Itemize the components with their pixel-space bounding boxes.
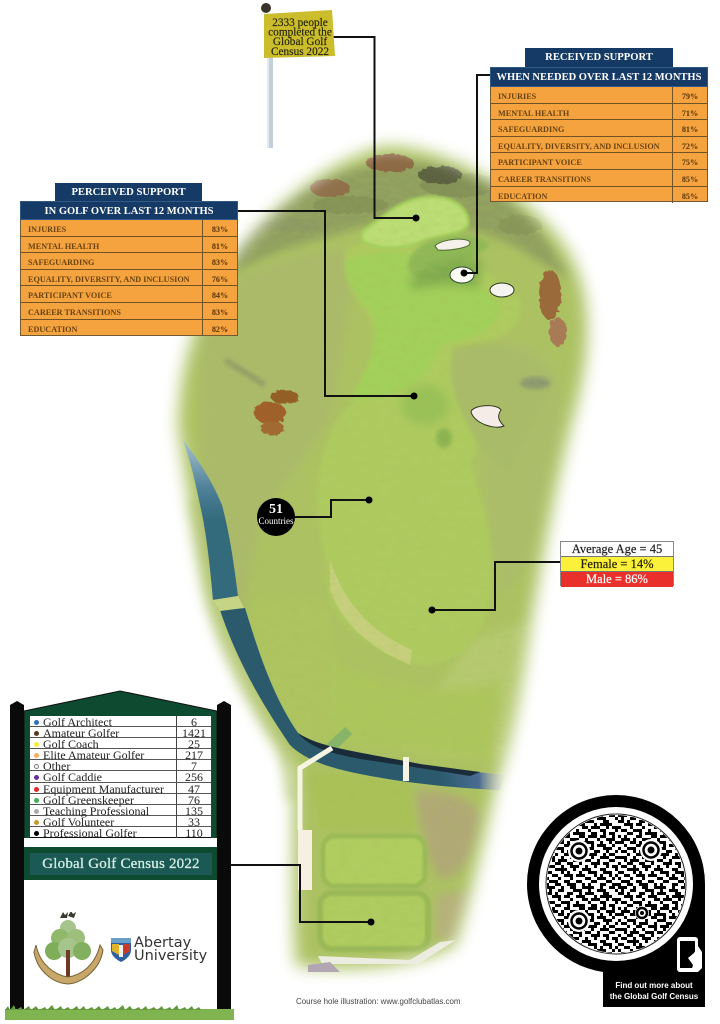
logo: Abertay University — [111, 935, 207, 964]
paths and bridges — [300, 748, 332, 830]
callout: age and gender: Male = 86% — [586, 572, 648, 586]
table: perceived support: MENTAL HEALTH — [28, 242, 99, 251]
table: received support: EQUALITY, DIVERSITY, AND INCLUSION — [498, 142, 660, 151]
texture — [150, 120, 620, 990]
role counts table: Golf Coach — [43, 737, 99, 751]
course hole illustration — [166, 134, 600, 981]
table: received support: 85% — [682, 192, 698, 201]
rough patches — [452, 356, 480, 441]
table: perceived support: INJURIES — [28, 225, 66, 234]
wordmark — [134, 935, 207, 964]
wordmark: Abertay — [134, 935, 191, 951]
QR code badge — [527, 795, 705, 1007]
role counts table: 135 — [185, 804, 203, 818]
rough base — [166, 134, 600, 981]
role counts table: Amateur Golfer — [43, 726, 119, 740]
table: received support: SAFEGUARDING — [498, 125, 564, 134]
role counts table: 1421 — [182, 726, 206, 740]
flag: respondent count: 2333 people — [272, 17, 328, 29]
finder rings — [568, 839, 662, 932]
table: perceived support: 84% — [212, 291, 228, 300]
table: perceived support: IN GOLF OVER LAST 12 MONTHS — [45, 206, 213, 217]
logo: golf crest — [34, 912, 104, 984]
flag: respondent count: Global Golf — [273, 36, 327, 48]
table: perceived support: 76% — [212, 275, 228, 284]
table: perceived support: PERCEIVED SUPPORT — [71, 187, 186, 198]
table: perceived support: 83% — [212, 308, 228, 317]
caption: Find out more about — [615, 981, 693, 990]
role counts table — [30, 716, 211, 838]
bushes — [254, 154, 567, 435]
table: perceived support: CAREER TRANSITIONS — [28, 308, 121, 317]
role counts table: 25 — [188, 737, 200, 751]
icon: phone with hand — [677, 937, 702, 972]
table: perceived support: 83% — [212, 225, 228, 234]
role counts table: 217 — [185, 748, 203, 762]
role counts table: Golf Caddie — [43, 770, 102, 784]
table: received support: PARTICIPANT VOICE — [498, 158, 582, 167]
table: perceived support: SAFEGUARDING — [28, 258, 94, 267]
table: received support: 81% — [682, 125, 698, 134]
illustration credit: Course hole illustration: www.golfclubatlas.com — [296, 997, 460, 1006]
shield — [111, 938, 131, 962]
table: received support: 85% — [682, 175, 698, 184]
table: perceived support: PARTICIPANT VOICE — [28, 291, 112, 300]
bridge over river — [213, 596, 244, 611]
table: perceived support: EDUCATION — [28, 325, 77, 334]
table: received support: 72% — [682, 142, 698, 151]
table: perceived support: 83% — [212, 258, 228, 267]
table: received support: MENTAL HEALTH — [498, 109, 569, 118]
table: received support: 75% — [682, 158, 698, 167]
role counts table: 47 — [188, 782, 200, 796]
flag: respondent count: Census 2022 — [271, 46, 329, 58]
table: received support: EDUCATION — [498, 192, 547, 201]
sign frame — [5, 690, 234, 1020]
caption: the Global Golf Census — [610, 992, 699, 1001]
base of illustration — [318, 940, 456, 964]
bunkers — [435, 239, 470, 250]
sign title: Global Golf Census 2022 — [42, 856, 200, 872]
callout: 51 countries: 51 — [269, 502, 283, 517]
caption — [610, 981, 699, 1001]
role counts table: Golf Architect — [43, 715, 112, 729]
callout: age and gender — [560, 541, 674, 586]
tee boxes — [323, 836, 425, 886]
role counts table: Equipment Manufacturer — [43, 782, 164, 796]
sign board: participant roles — [5, 690, 234, 1020]
role counts table: 76 — [188, 793, 200, 807]
table: perceived support: 82% — [212, 325, 228, 334]
role counts table: Elite Amateur Golfer — [43, 748, 144, 762]
callout: age and gender: Female = 14% — [580, 557, 654, 571]
role counts table: 6 — [191, 715, 197, 729]
role counts table: Golf Greenskeeper — [43, 793, 134, 807]
table: received support: 79% — [682, 92, 698, 101]
callout: age and gender: Average Age = 45 — [572, 542, 662, 556]
scrub along the top — [313, 172, 542, 236]
river — [183, 440, 238, 600]
fairway — [318, 240, 520, 665]
role counts table: Professional Golfer — [43, 826, 137, 840]
table: received support: RECEIVED SUPPORT — [545, 52, 653, 63]
role counts table: 7 — [191, 759, 197, 773]
flag: respondent count: completed the — [268, 26, 332, 38]
callout: 51 countries: Countries — [258, 516, 294, 526]
table: received support: INJURIES — [498, 92, 536, 101]
table: received support — [490, 48, 708, 203]
pale bank beside river — [195, 500, 292, 800]
table: received support: WHEN NEEDED OVER LAST 12 MONTHS — [497, 72, 701, 83]
table: perceived support — [20, 183, 238, 336]
role counts table: 33 — [188, 815, 200, 829]
badge body — [527, 795, 705, 1007]
flag: respondent count — [261, 3, 335, 148]
role counts table: Teaching Professional — [43, 804, 149, 818]
table: perceived support: EQUALITY, DIVERSITY, AND INCLUSION — [28, 275, 190, 284]
table: received support: CAREER TRANSITIONS — [498, 175, 591, 184]
table: received support: 71% — [682, 109, 698, 118]
QR modules — [547, 815, 685, 953]
role counts table: 110 — [185, 826, 203, 840]
lower rough — [310, 774, 415, 830]
role counts table: Golf Volunteer — [43, 815, 114, 829]
role counts table: Other — [43, 759, 70, 773]
green — [362, 197, 468, 248]
callout: 51 countries — [257, 498, 295, 536]
wordmark: University — [134, 948, 207, 964]
role counts table: 256 — [185, 770, 203, 784]
table: perceived support: 81% — [212, 242, 228, 251]
